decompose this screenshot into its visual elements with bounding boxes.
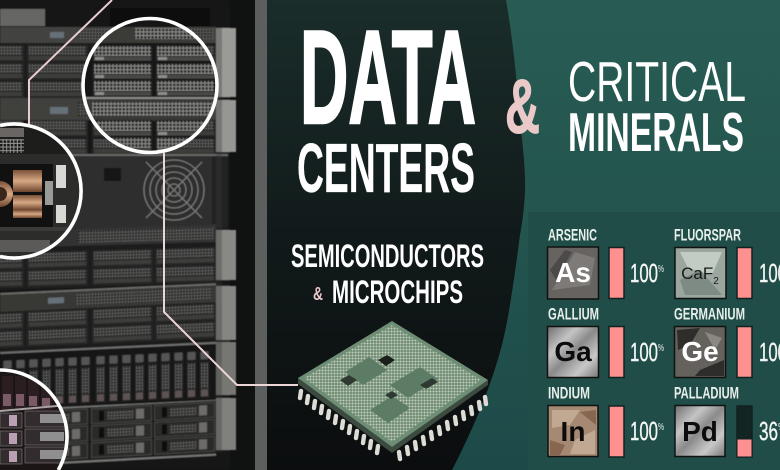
mineral: indium: 100 xyxy=(630,416,658,446)
title: Data Centers xyxy=(297,4,476,207)
mineral: fluorspar: CaF xyxy=(681,264,713,283)
mineral: arsenic: ARSENIC xyxy=(548,226,597,244)
connector line: top xyxy=(29,0,112,125)
mineral: gallium: Ga xyxy=(554,336,592,367)
mineral: palladium: Pd xyxy=(682,416,718,447)
mineral: indium: % xyxy=(658,422,664,433)
mineral: indium xyxy=(548,384,664,457)
mineral: palladium xyxy=(674,384,780,457)
server rows middle xyxy=(0,224,216,291)
panel: teal curved background xyxy=(452,0,780,470)
mineral: gallium xyxy=(548,304,664,378)
mineral: germanium xyxy=(674,304,780,378)
title: Data Centers: DATA xyxy=(300,4,476,152)
mineral: fluorspar: 2 xyxy=(713,276,719,287)
connector line: to microchip xyxy=(164,153,298,385)
mineral: arsenic: As xyxy=(555,257,591,288)
callout circle: storage bays xyxy=(0,370,68,470)
subtitle: Semiconductors & Microchips: MICROCHIPS xyxy=(332,274,463,310)
callout circle: copper coils xyxy=(0,124,85,258)
subtitle: Semiconductors & Microchips: & xyxy=(313,284,323,304)
mineral: fluorspar xyxy=(674,226,780,298)
mineral: indium: In xyxy=(561,416,585,447)
mineral: fluorspar: FLUORSPAR xyxy=(674,226,741,244)
mineral: gallium: % xyxy=(658,343,664,354)
subtitle: Semiconductors & Microchips xyxy=(291,238,484,310)
rack ears xyxy=(216,28,236,452)
hard drive bay xyxy=(0,342,216,412)
ampersand: & xyxy=(505,64,540,150)
panel: server rack xyxy=(0,0,236,470)
mineral: indium: INDIUM xyxy=(548,384,590,402)
mineral: germanium: Ge xyxy=(681,336,719,367)
mineral: palladium: PALLADIUM xyxy=(674,384,739,402)
mineral: gallium: 100 xyxy=(630,337,658,367)
callout circle: server drives xyxy=(80,15,220,157)
icon: microchip xyxy=(298,321,488,459)
chip pins xyxy=(300,391,486,459)
panel: minerals xyxy=(528,212,780,470)
title: Data Centers: CENTERS xyxy=(297,129,475,207)
drive trays bottom xyxy=(62,400,217,464)
rack post xyxy=(230,0,255,470)
mineral: arsenic: % xyxy=(658,264,664,275)
mineral: arsenic: 100 xyxy=(630,258,658,288)
subtitle: Semiconductors & Microchips: SEMICONDUCTORS xyxy=(291,238,484,274)
mineral: germanium: GERMANIUM xyxy=(674,304,745,324)
rack side strip xyxy=(255,0,267,470)
title: Critical Minerals xyxy=(568,50,746,163)
panel: dark title background xyxy=(267,0,780,470)
power supply unit xyxy=(72,156,228,228)
mineral: arsenic xyxy=(548,226,664,299)
mineral: gallium: GALLIUM xyxy=(548,304,599,324)
